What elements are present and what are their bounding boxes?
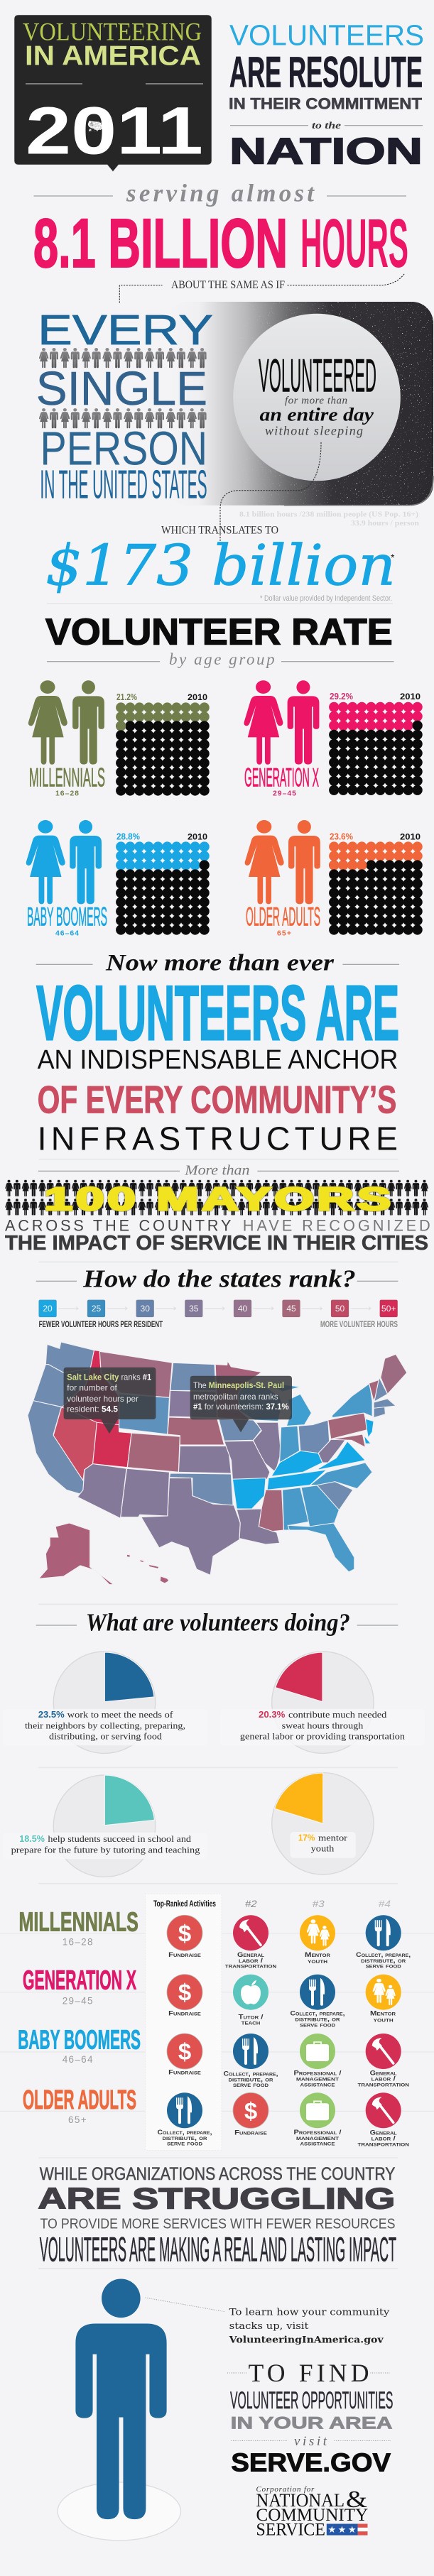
column headers: #2 [245, 1899, 257, 1909]
figures [26, 820, 102, 904]
text: community lookup: VolunteeringInAmerica.gov [229, 2335, 384, 2346]
pie base [272, 1652, 374, 1753]
captions row: baby boomers: Collect, prepare, [223, 2070, 278, 2077]
captions row: older adults: General [370, 2129, 397, 2136]
pie wedge [276, 1652, 322, 1702]
panel: food pie [3, 1652, 207, 1753]
year: 2010 [400, 693, 421, 702]
panel: night sky with circle [202, 302, 434, 506]
caption: distributing, or serving food [49, 1731, 163, 1742]
panel: find opportunities [227, 2359, 393, 2477]
caption [25, 1709, 185, 1742]
captions row: older adults: serve food [167, 2140, 203, 2147]
captions row: baby boomers: assistance [300, 2080, 335, 2087]
legend boxes [39, 1300, 398, 1317]
captions row: millennials: transportation [225, 1963, 276, 1970]
text: community lookup: stacks up, visit [229, 2321, 309, 2332]
rule right [345, 125, 423, 126]
age label: baby boomers: 46–64 [63, 2054, 93, 2065]
text: community lookup [229, 2308, 390, 2346]
icon row: millennials [167, 1915, 401, 1950]
callout: salt lake city: for number of [67, 1382, 117, 1392]
logo: corporation for national and community service: & [346, 2487, 367, 2513]
text: which translates to: WHICH TRANSLATES TO [161, 525, 278, 537]
headline: in their commitment: IN THEIR COMMITMENT [229, 94, 423, 112]
captions row: older adults: Fundraise [234, 2129, 267, 2136]
person [75, 2279, 167, 2519]
legend numbers: 50+ [381, 1304, 396, 1314]
legend numbers [43, 1304, 396, 1314]
badge line: in america: IN AMERICA [25, 41, 201, 72]
asterisk: * [391, 552, 395, 563]
captions row: baby boomers: labor / [371, 2075, 396, 2083]
white circle [233, 314, 401, 481]
caption [11, 1833, 200, 1855]
headline: to the: to the [312, 121, 341, 131]
pie wedge [275, 1773, 323, 1823]
panel: headline stack [229, 18, 424, 173]
age label: generation x: GENERATION X [23, 1966, 136, 1996]
captions row: baby boomers: transportation [358, 2080, 409, 2087]
text: for more than: for more than [285, 395, 347, 406]
panel: every single person [36, 306, 213, 508]
logo: corporation for national and community service [256, 2485, 368, 2540]
star field [236, 302, 433, 506]
dot grid [329, 841, 423, 935]
legend numbers: 40 [238, 1304, 247, 1314]
callout background [64, 1368, 156, 1434]
icon: small us map [88, 121, 108, 131]
icon row: older adults [167, 2092, 401, 2128]
dot grid [116, 702, 210, 796]
year: 2010 [188, 694, 207, 702]
subheading: more than: More than [184, 1162, 250, 1178]
caption: 23.5% [38, 1710, 65, 1720]
figures [244, 680, 319, 765]
callout: minneapolis st paul: metropolitan area ranks [193, 1392, 278, 1402]
figures [28, 680, 104, 765]
callout text: Salt Lake City ranks #1 [67, 1372, 151, 1382]
percentage: 21.2% [116, 692, 137, 702]
legend numbers: 25 [92, 1304, 101, 1314]
caption: prepare for the future by tutoring and teaching [11, 1844, 200, 1855]
captions row: millennials: serve food [366, 1963, 402, 1970]
caption box [3, 1833, 207, 1859]
footnote: calculation [239, 510, 419, 528]
captions row: generation x: Mentor [370, 2010, 396, 2017]
caption: youth [311, 1843, 335, 1854]
text: every: EVERY [38, 306, 213, 354]
captions row: older adults: labor / [371, 2135, 396, 2142]
callout: salt lake city: resident: 54.5 [67, 1404, 118, 1414]
panel: top-ranked activities [0, 1894, 434, 2150]
caption [240, 1709, 406, 1742]
text: community lookup: To learn how your community [229, 2308, 390, 2318]
age label: older adults: OLDER ADULTS [23, 2085, 136, 2115]
captions row: millennials: distribute, or [361, 1957, 406, 1964]
panel: millennials rate: MILLENNIALS [29, 763, 105, 792]
captions row: millennials [168, 1951, 411, 1970]
icon row: generation x [167, 1975, 401, 2010]
legend numbers: 20 [43, 1304, 53, 1314]
panel: mentor pie [272, 1773, 374, 1874]
icon row: baby boomers [167, 2034, 401, 2069]
captions row: older adults: assistance [300, 2140, 335, 2147]
platform [58, 2482, 180, 2540]
row guide lines [0, 1933, 434, 2111]
footnote: calculation: 33.9 hours / person [351, 519, 419, 528]
age label: baby boomers: BABY BOOMERS [18, 2026, 141, 2056]
dotted leader from head [146, 2298, 224, 2312]
age label: baby boomers [18, 2026, 141, 2065]
captions row: millennials: General [237, 1951, 264, 1958]
age range: 65+ [277, 929, 291, 937]
caption: 17% [298, 1833, 315, 1843]
logo: corporation for national and community service: SERVICE [256, 2521, 325, 2540]
dot grid [116, 841, 210, 935]
panel: baby boomers rate [26, 820, 210, 937]
captions row: millennials: labor / [239, 1957, 264, 1964]
captions row: baby boomers: Fundraise [168, 2069, 201, 2076]
line: to provide: TO PROVIDE MORE SERVICES WITH FEWER RESOURCES [40, 2216, 395, 2232]
callout: minneapolis st paul: #1 for volunteerism: 37.1% [193, 1402, 289, 1412]
icon row: generation x: $ [178, 1980, 191, 2006]
percentage: 28.8% [116, 831, 140, 841]
captions row: older adults: Collect, prepare, [158, 2129, 212, 2136]
captions row: generation x: distribute, or [295, 2016, 340, 2023]
headline: volunteers: VOLUNTEERS [229, 18, 424, 51]
captions row: generation x: Fundraise [168, 2010, 201, 2017]
space background [166, 302, 433, 506]
pie wedge [104, 1775, 155, 1825]
panel: millennials rate [28, 680, 210, 798]
captions row: millennials: Fundraise [168, 1951, 201, 1958]
captions row: generation x: Tutor / [239, 2013, 264, 2020]
legend caption right: MORE VOLUNTEER HOURS [320, 1319, 398, 1329]
age label: older adults: 65+ [68, 2114, 87, 2125]
text: without sleeping: without sleeping [265, 424, 363, 438]
callout background [190, 1376, 292, 1432]
line: are struggling: ARE STRUGGLING [38, 2183, 395, 2215]
text: person: PERSON [40, 422, 207, 475]
age label: millennials: 16–28 [63, 1936, 92, 1947]
footnote: calculation: 8.1 billion hours /238 million people (US Pop. 16+) [239, 510, 418, 518]
callout text: The Minneapolis-St. Paul [193, 1380, 284, 1390]
captions row: older adults: management [296, 2134, 339, 2141]
age range: 16–28 [55, 790, 79, 798]
subheading: by age group: by age group [169, 650, 275, 668]
pie base [53, 1775, 156, 1877]
panel: labor pie [220, 1652, 425, 1753]
age range: 46–64 [55, 929, 79, 937]
panel: title badge [14, 15, 212, 172]
badge background with pointer [14, 15, 212, 172]
panel: older adults rate [245, 820, 423, 937]
captions row: generation x [168, 2010, 396, 2028]
legend numbers: 45 [286, 1304, 296, 1314]
captions row: older adults [158, 2129, 409, 2147]
age label: generation x: 29–45 [63, 1996, 92, 2007]
dot grid [329, 702, 423, 795]
text: serve.gov: SERVE.GOV [231, 2449, 391, 2477]
captions row: millennials: youth [308, 1958, 327, 1965]
icon row: millennials: $ [178, 1920, 191, 1946]
highlighted first column [146, 1894, 222, 2150]
headline: nation: NATION [229, 131, 423, 173]
caption box [3, 1709, 207, 1745]
big number: 173 billion: $173 billion [45, 533, 396, 598]
callout: minneapolis st paul [190, 1376, 292, 1432]
text: across the country have recognized [5, 1216, 430, 1234]
dotted connector middle [220, 442, 321, 543]
captions row: generation x: Collect, prepare, [290, 2010, 345, 2017]
icon row: baby boomers: $ [178, 2039, 191, 2065]
legend: volunteer hours scale [39, 1300, 398, 1329]
captions row: baby boomers: Professional / [294, 2070, 342, 2077]
logo: corporation for national and community service: COMMUNITY [256, 2506, 368, 2525]
percentage: 29.2% [330, 691, 353, 702]
badge line: volunteering: VOLUNTEERING [23, 18, 202, 46]
legend caption left: FEWER VOLUNTEER HOURS PER RESIDENT [39, 1319, 163, 1329]
heading: serving almost: serving almost [126, 179, 315, 207]
captions row: older adults: transportation [358, 2140, 409, 2147]
caption: 18.5% [19, 1834, 45, 1844]
footnote: independent sector: * Dollar value provided by Independent Sector. [260, 594, 392, 603]
heading: volunteer rate: VOLUNTEER RATE [45, 611, 393, 653]
text: single: SINGLE [36, 362, 207, 415]
legend numbers: 50 [335, 1304, 345, 1314]
year: 2010 [400, 833, 421, 841]
logo: corporation for national and community service: NATIONAL [256, 2490, 345, 2511]
caption: help students succeed in school and [48, 1833, 192, 1844]
illustration: standing person on platform [58, 2279, 180, 2540]
captions row: baby boomers: General [370, 2070, 397, 2077]
caption box [220, 1709, 425, 1745]
column headers: #3 [313, 1899, 325, 1909]
dotted connector top [119, 274, 404, 302]
text: across the country have recognized: HAVE RECOGNIZED [243, 1216, 430, 1234]
callout: salt lake city [64, 1368, 156, 1434]
caption: work to meet the needs of [67, 1709, 173, 1720]
people row one [39, 348, 207, 368]
panel: 100 mayors [5, 1180, 429, 1217]
chart: us map of volunteer hours [28, 1342, 407, 1585]
callout: salt lake city: volunteer hours per [67, 1394, 139, 1404]
statement: an indispensable anchor: AN INDISPENSABLE ANCHOR [38, 1045, 398, 1075]
caption: their neighbors by collecting, preparing, [25, 1720, 185, 1730]
age range: 29–45 [273, 790, 296, 798]
flag: ★★★ [328, 2525, 357, 2536]
panel: baby boomers rate: BABY BOOMERS [27, 902, 107, 931]
text: in your area: IN YOUR AREA [231, 2414, 393, 2433]
text: across the country have recognized: ACROSS THE COUNTRY [5, 1216, 232, 1234]
dotted rules [227, 2373, 391, 2441]
text: an entire day: an entire day [260, 405, 374, 425]
caption: sweat hours through [282, 1720, 364, 1730]
column headers: #4 [379, 1899, 391, 1909]
captions row: baby boomers: management [296, 2075, 339, 2083]
captions row: generation x: serve food [300, 2021, 336, 2028]
text: about the same as if: ABOUT THE SAME AS IF [171, 279, 285, 291]
captions row: generation x: teach [242, 2019, 260, 2026]
logo: corporation for national and community service: Corporation for [256, 2485, 315, 2494]
caption: contribute much needed [288, 1709, 387, 1720]
captions row: baby boomers [168, 2069, 409, 2088]
badge rule right [146, 83, 203, 84]
panel: tutoring pie [3, 1775, 207, 1877]
legend numbers: 30 [141, 1304, 150, 1314]
figures [245, 820, 320, 904]
heading: now more than ever: Now more than ever [105, 951, 335, 976]
age label: generation x [23, 1966, 136, 2007]
age label: millennials [18, 1907, 139, 1947]
captions row: older adults: distribute, or [162, 2134, 207, 2141]
badge year: 2011 [26, 94, 203, 169]
legend arrows [58, 1306, 371, 1310]
captions row: baby boomers: serve food [233, 2081, 269, 2088]
caption box [290, 1832, 356, 1858]
text: 100 mayors: 100 MAYORS [44, 1181, 394, 1217]
pie wedge [104, 1652, 154, 1702]
people rows [5, 1180, 429, 1216]
rule left [230, 125, 308, 126]
caption [298, 1833, 348, 1854]
caption: 20.3% [259, 1710, 285, 1720]
people row two [39, 408, 207, 428]
panel: generation x rate [244, 680, 423, 798]
column headers [153, 1899, 391, 1909]
year: 2010 [188, 833, 207, 841]
text: to find: TO FIND [249, 2359, 369, 2387]
statement: infrastructure: INFRASTRUCTURE [38, 1120, 398, 1157]
caption: mentor [318, 1833, 348, 1843]
age label: millennials: MILLENNIALS [18, 1907, 139, 1937]
badge rule left [26, 83, 82, 84]
captions row: generation x: youth [374, 2016, 394, 2023]
panel: closing statement [38, 2165, 396, 2269]
captions row: millennials: Collect, prepare, [356, 1951, 411, 1958]
captions row: baby boomers: distribute, or [229, 2075, 273, 2083]
legend numbers: 35 [189, 1304, 199, 1314]
heading: how do the states rank: How do the states rank? [82, 1266, 356, 1293]
icon row: older adults: $ [244, 2097, 257, 2124]
heading: what are volunteers doing: What are volunteers doing? [86, 1610, 350, 1637]
caption: general labor or providing transportation [240, 1731, 406, 1742]
captions row: older adults: Professional / [294, 2129, 342, 2136]
captions row: millennials: Mentor [305, 1951, 331, 1958]
column headers: Top-Ranked Activities [153, 1899, 216, 1909]
pie base [53, 1652, 156, 1753]
age label: older adults [23, 2085, 136, 2125]
text: visit: visit [294, 2434, 327, 2449]
percentage: 23.6% [330, 831, 353, 841]
text: the impact of service: THE IMPACT OF SERVICE IN THEIR CITIES [5, 1232, 428, 1255]
big number: 8.1 billion hours: 8.1 BILLION [33, 204, 288, 282]
pie base [272, 1773, 374, 1874]
flag [327, 2523, 368, 2536]
